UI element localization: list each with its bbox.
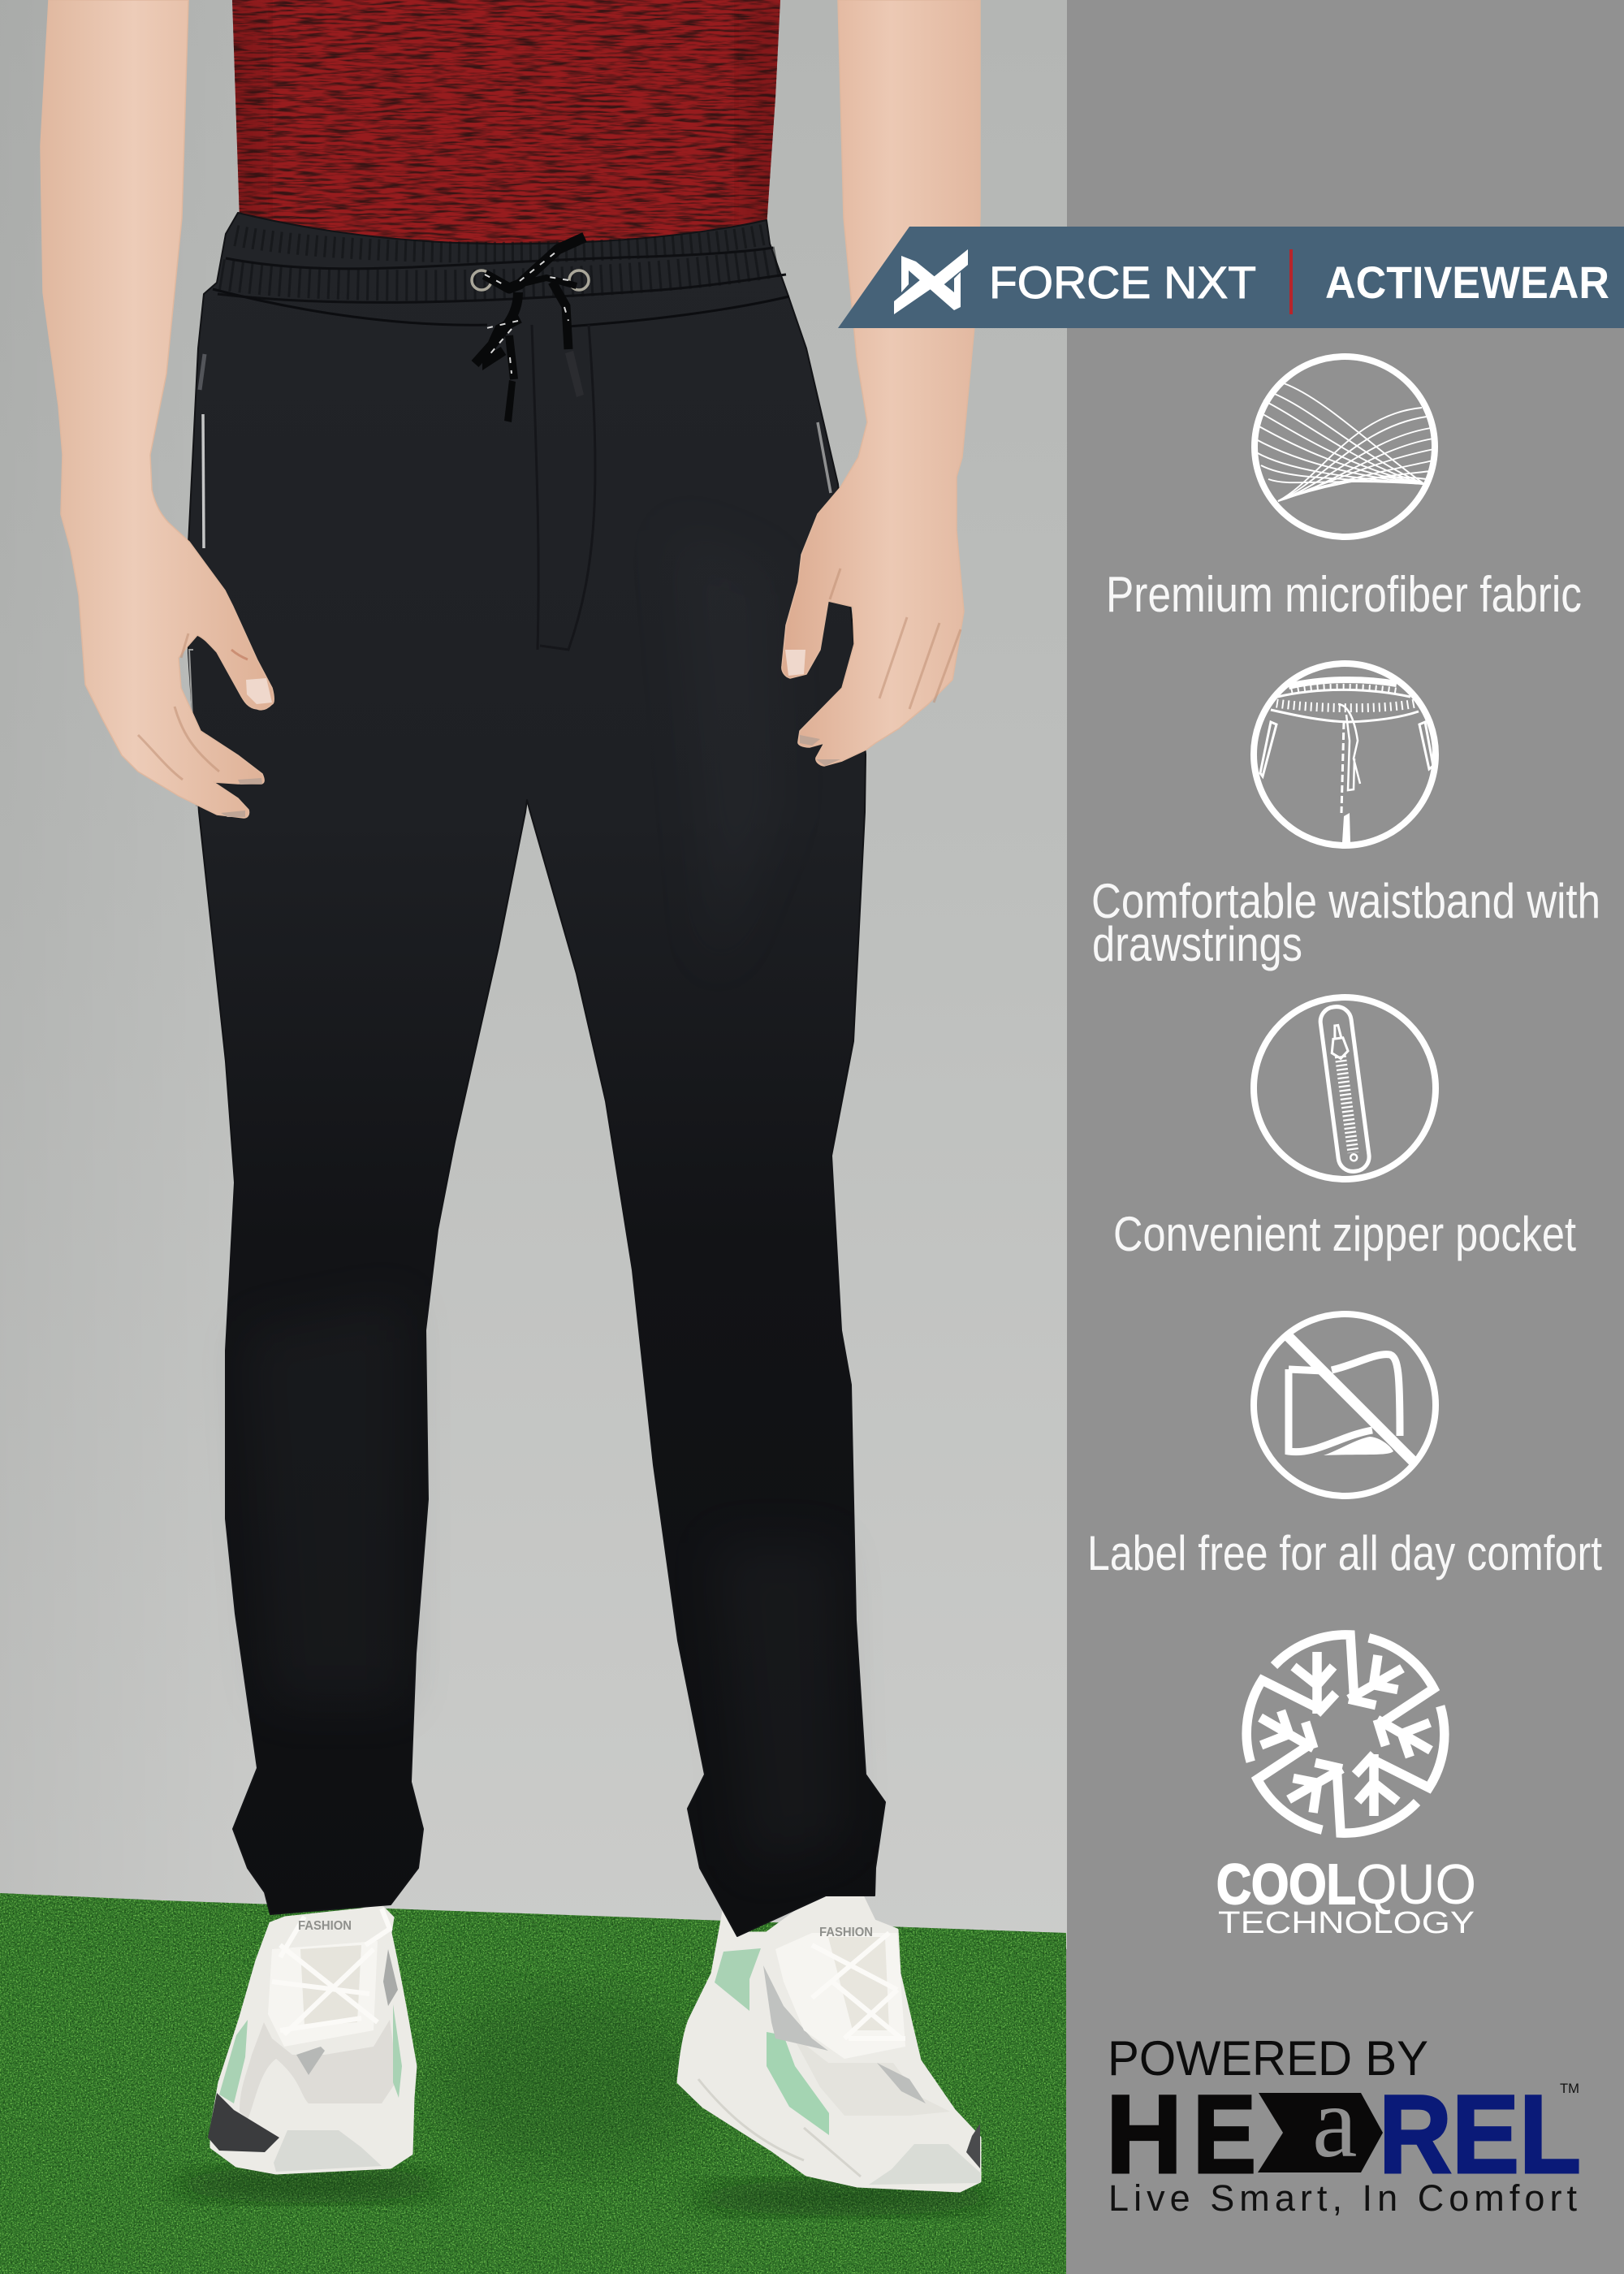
icon: zipper [1254,997,1436,1179]
tagline: Live Smart, In Comfort [1108,2177,1577,2219]
feature: waistband [1091,664,1600,971]
Hexarel wordmark: TM [1560,2081,1579,2096]
brand name: FORCE NXT [989,257,1256,308]
feature: zipper pocket [1113,997,1576,1261]
icon: snowflake ring [1224,1623,1467,1845]
photo: product model on studio background [0,0,1067,2274]
studio wall background [0,0,1067,1949]
white sneakers [208,1896,980,2191]
Hexarel wordmark: a [1312,2067,1357,2179]
waistband with gathers [213,234,789,650]
model's right-side arm and hand [782,0,980,766]
drawstring and eyelets [472,237,589,422]
shoe tongue label: FASHION [298,1919,352,1933]
icon: waistband with drawstrings [1254,664,1436,845]
red divider [1289,249,1293,314]
fabric highlights [244,528,844,1868]
right sneaker [678,1896,980,2191]
artificial grass floor [0,1884,1067,2274]
feature label [1091,874,1600,971]
icon: fibre waves in circle [1255,357,1435,537]
feature: Coolquo technology [1216,1623,1476,1940]
Coolquo wordmark [1216,1852,1476,1940]
logo: powered by Hexarel [1106,2031,1581,2219]
model's left-side arm and hand [41,0,274,818]
left sneaker [208,1906,416,2173]
Coolquo wordmark: COOL [1216,1852,1356,1916]
black track pants [188,213,885,1936]
Coolquo wordmark: QUO [1356,1852,1476,1916]
banner: brand and category [838,227,1624,328]
category name: ACTIVEWEAR [1325,257,1609,308]
Hexarel wordmark: E [1193,2073,1256,2197]
panel: feature column [1067,0,1624,2274]
icon: crossed-out label [1254,1314,1436,1496]
icon: Force NXT logo [894,249,968,314]
feature: label free [1087,1314,1602,1580]
shoe tongue label: FASHION [819,1926,873,1939]
powered by line: POWERED BY [1108,2031,1428,2086]
feature label: drawstrings [1092,917,1302,971]
Coolquo wordmark: TECHNOLOGY [1218,1906,1475,1940]
zip pocket trims [189,354,831,806]
Hexarel wordmark: REL [1379,2073,1581,2197]
feature: microfiber fabric [1106,357,1582,623]
Hexarel wordmark: H [1106,2073,1182,2197]
red heather t-shirt [219,0,788,260]
Hexarel wordmark [1106,2067,1581,2197]
